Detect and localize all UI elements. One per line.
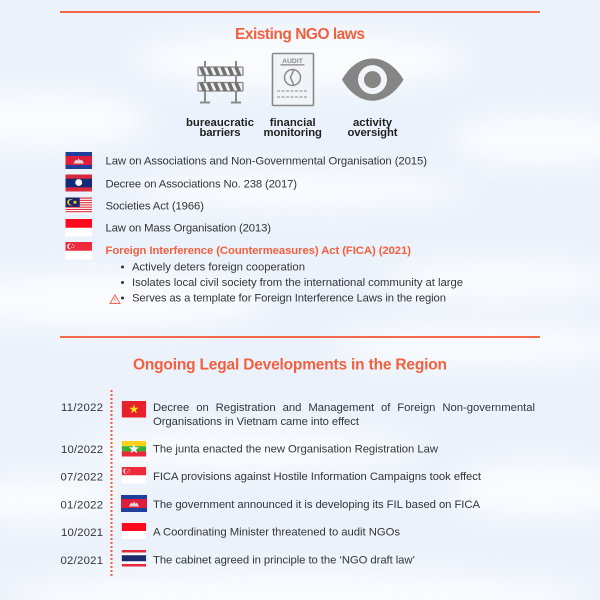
icon: warning triangle — [110, 295, 120, 304]
entry: 10/2021 Indonesia: 10/2021 — [61, 527, 103, 539]
entry: 02/2021 Thailand: 02/2021 — [60, 555, 103, 567]
caption: financial monitoring: monitoring — [263, 127, 322, 139]
entry: 11/2022 Vietnam — [61, 401, 535, 428]
law: Singapore FICA: Foreign Interference (Countermeasures) Act (FICA) (2021) — [106, 245, 411, 257]
entry: 11/2022 Vietnam: Organisations in Vietnam came into effect — [153, 416, 360, 428]
law: Laos: Decree on Associations No. 238 (2017) — [106, 178, 297, 190]
entry: 01/2022 Cambodia: 01/2022 — [60, 500, 103, 512]
caption: activity oversight: activity — [353, 117, 393, 129]
entry: 01/2022 Cambodia — [60, 495, 480, 512]
entry: 02/2021 Thailand — [60, 550, 415, 567]
divider: middle — [60, 336, 540, 338]
law: Singapore FICA — [66, 242, 411, 260]
law list — [66, 152, 463, 304]
entry: 02/2021 Thailand: The cabinet agreed in principle to the ‘NGO draft law’ — [153, 554, 415, 566]
caption: activity oversight — [348, 117, 398, 139]
law: Cambodia — [66, 152, 427, 169]
icon: audit document — [272, 54, 314, 106]
entry: 07/2022 Singapore: 07/2022 — [60, 472, 103, 484]
entry: 11/2022 Vietnam: Decree on Registration and Management of Foreign Non-governmental — [153, 402, 535, 414]
caption: financial monitoring: financial — [270, 117, 316, 129]
entry: 10/2021 Indonesia — [61, 523, 400, 539]
caption: activity oversight: oversight — [348, 127, 398, 139]
caption: financial monitoring — [263, 117, 322, 139]
law: Malaysia — [66, 198, 204, 214]
divider: top — [60, 11, 540, 13]
bullet: isolates civil society: Isolates local civil society from the international community at large — [132, 277, 463, 289]
icon: eye — [342, 58, 404, 101]
timeline dotted line — [110, 390, 112, 578]
entry: 07/2022 Singapore: FICA provisions against Hostile Information Campaigns took effect — [153, 471, 482, 483]
entry: 10/2022 Myanmar: 10/2022 — [61, 444, 103, 456]
entry: 10/2021 Indonesia: A Coordinating Minister threatened to audit NGOs — [153, 526, 400, 538]
law: Malaysia: Societies Act (1966) — [106, 200, 204, 212]
entry: 10/2022 Myanmar — [61, 441, 439, 456]
entry: 01/2022 Cambodia: The government announced it is developing its FIL based on FICA — [153, 499, 480, 511]
caption: bureaucratic barriers: barriers — [200, 127, 240, 139]
bullet: deters cooperation: Actively deters foreign cooperation — [132, 262, 305, 274]
bullet: template: Serves as a template for Foreign Interference Laws in the region — [132, 292, 446, 304]
icon: road barrier — [198, 61, 243, 102]
icon: audit document: AUDIT — [282, 58, 304, 65]
heading: Ongoing Legal Developments: Ongoing Legal Developments in the Region — [133, 356, 447, 374]
caption: bureaucratic barriers: bureaucratic — [186, 117, 254, 129]
law: Indonesia — [66, 219, 271, 236]
entry: 11/2022 Vietnam: 11/2022 — [61, 402, 103, 414]
caption: bureaucratic barriers — [186, 117, 254, 139]
heading: Existing NGO laws: Existing NGO laws — [235, 26, 365, 43]
entry: 07/2022 Singapore — [60, 467, 482, 484]
timeline entries — [60, 401, 535, 567]
law: Laos — [66, 174, 297, 192]
law: Cambodia: Law on Associations and Non-Governmental Organisation (2015) — [106, 156, 427, 168]
entry: 10/2022 Myanmar: The junta enacted the new Organisation Registration Law — [153, 444, 439, 456]
law: Indonesia: Law on Mass Organisation (2013) — [106, 222, 271, 234]
